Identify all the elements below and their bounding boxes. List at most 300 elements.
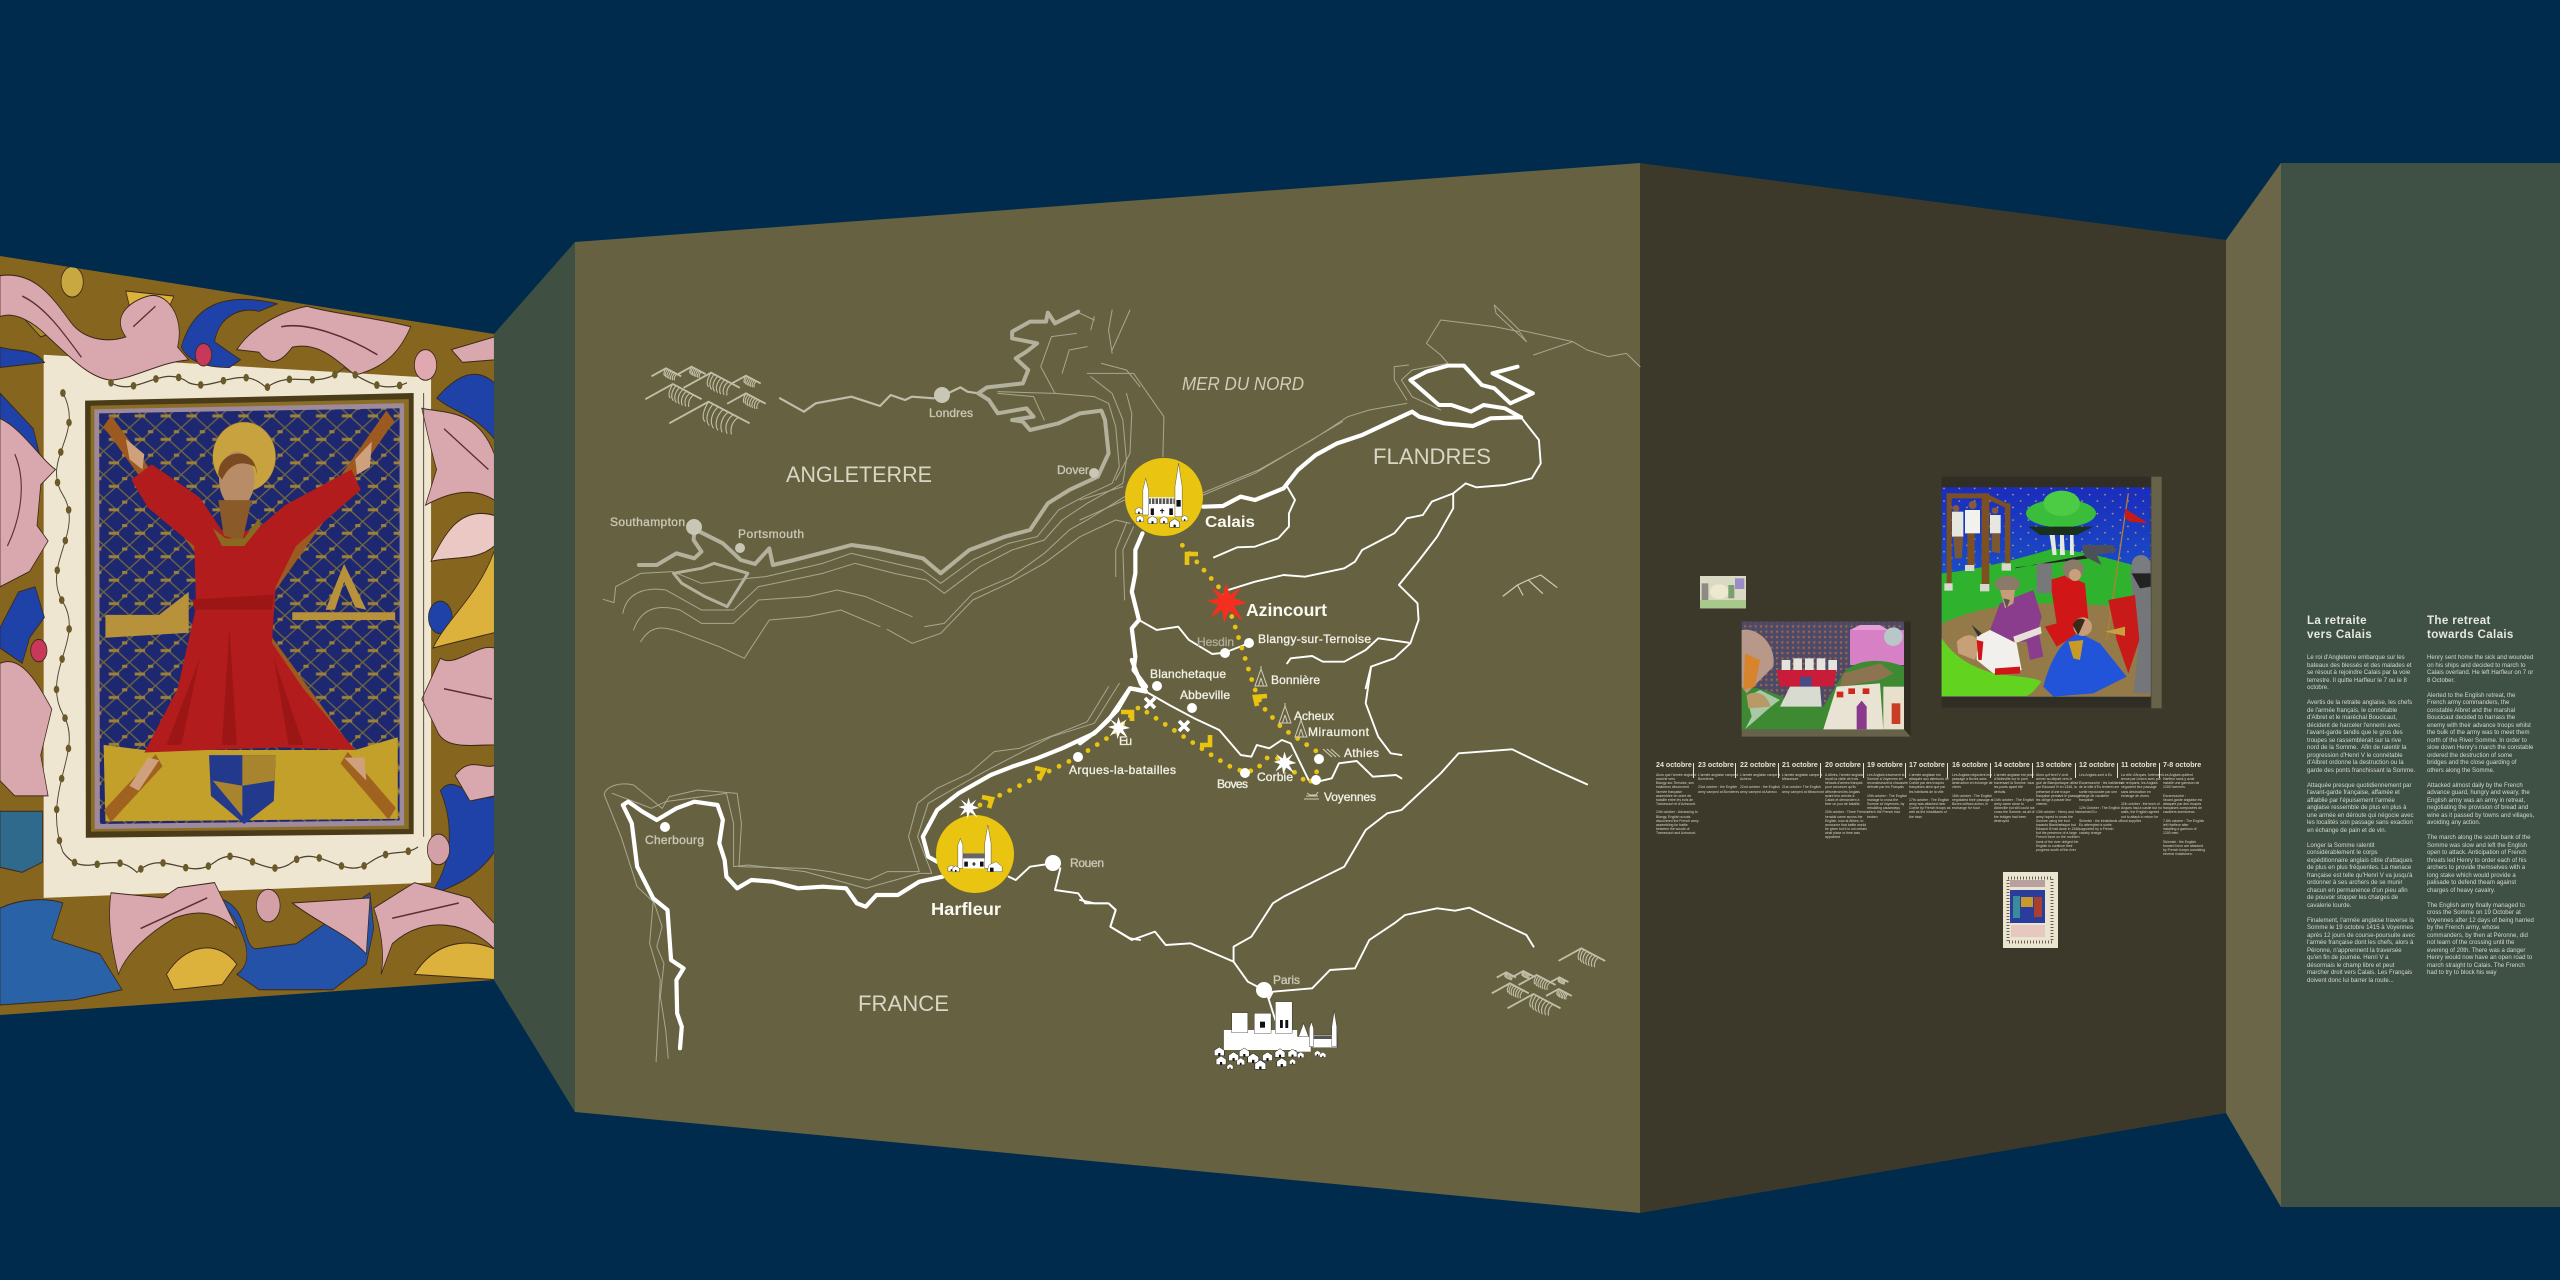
major city labels xyxy=(931,514,1327,919)
red robe xyxy=(131,464,361,753)
icon: mountains England xyxy=(645,367,766,434)
timeline column 12 octobre: reached Eu xyxy=(2079,810,2097,814)
timeline column 24 octobre: 24th october : Advancing to xyxy=(1656,810,1698,814)
timeline column 17 octobre: well as the inhabitants of xyxy=(1909,810,1947,814)
timeline column 13 octobre: progress south of the river xyxy=(2036,848,2076,852)
timeline column 20 octobre: pour annoncer qu'ils xyxy=(1825,785,1856,789)
timeline column 7-8 octobre xyxy=(2163,761,2205,856)
town labels: Portsmouth xyxy=(738,527,804,541)
French paragraphs: en échange de pain et de vin. xyxy=(2307,828,2386,834)
timeline column 19 octobre: Somme at Voyennes, by xyxy=(1867,802,1904,806)
timeline column 20 octobre: appointed xyxy=(1825,835,1840,839)
timeline column 23 octobre: L'armée anglaise campe à xyxy=(1698,773,1738,777)
English paragraphs: not learn of the crossing until the xyxy=(2427,940,2514,946)
town labels: Rouen xyxy=(1070,856,1104,870)
English coastline xyxy=(639,312,1109,573)
English paragraphs: had to try to block his way xyxy=(2427,970,2497,976)
icon: rain hatch at Athies xyxy=(1323,749,1340,757)
image: manuscript page thumbnail xyxy=(2003,872,2058,948)
red executioner xyxy=(2045,575,2088,647)
French paragraphs: bateaux des blessés et des malades et xyxy=(2307,662,2412,668)
timeline column 20 octobre: announce that battle would xyxy=(1825,823,1866,827)
timeline column 12 octobre: 12th October : The English xyxy=(2079,806,2120,810)
timeline column 7-8 octobre: installing a garrison of xyxy=(2163,827,2196,831)
English paragraphs: slow down Henry's march the constable xyxy=(2427,745,2533,751)
timeline column 11 octobre: not to attack in return for xyxy=(2121,815,2158,819)
English paragraphs: ordered the destruction of some xyxy=(2427,752,2512,758)
French paragraphs: d'Albret et le maréchal Boucicaut, xyxy=(2307,715,2397,721)
timeline column 21 octobre: 21 octobre xyxy=(1782,761,1818,769)
French paragraphs: de plus en plus fréquentes. La menace xyxy=(2307,865,2411,871)
region labels: ANGLETERRE xyxy=(786,462,932,487)
timeline column 7-8 octobre: Escarmouche : xyxy=(2163,794,2186,798)
timeline column 13 octobre: but the presence of a large xyxy=(2036,831,2077,835)
timeline column 11 octobre: échange de vivres. xyxy=(2121,794,2150,798)
timeline column 13 octobre: Alors qu'Henri V croit xyxy=(2036,773,2068,777)
French paragraphs: Avertis de la retraite anglaise, les chefs xyxy=(2307,700,2412,706)
English paragraphs: palisade to defend theam against xyxy=(2427,880,2516,886)
hands and feet xyxy=(126,439,372,791)
timeline column 7-8 octobre: Skirmish : the English xyxy=(2163,840,2196,844)
icon: Harfleur marker xyxy=(936,815,1014,893)
English paragraphs: wine as it passed by towns and villages, xyxy=(2427,812,2534,818)
English paragraphs: others along the Somme. xyxy=(2427,768,2495,774)
timeline column 11 octobre: sans destruction en xyxy=(2121,790,2151,794)
timeline column 24 octobre: Tramecourt and Azincourt. xyxy=(1656,831,1696,835)
timeline column 14 octobre xyxy=(1994,761,2035,823)
English paragraphs: by the French army, whose xyxy=(2427,925,2499,931)
timeline column 20 octobre: what place or time was xyxy=(1825,831,1860,835)
timeline column 12 octobre: cavalry charge xyxy=(2079,831,2101,835)
timeline column 17 octobre: françaises ainsi que par xyxy=(1909,785,1945,789)
timeline column 13 octobre: English to continue their xyxy=(2036,844,2073,848)
timeline column 17 octobre: L'armée anglaise est xyxy=(1909,773,1941,777)
French paragraphs: désormais le champ libre et peut xyxy=(2307,962,2394,968)
timeline column 7-8 octobre: 7-8 octobre xyxy=(2163,761,2201,769)
timeline column 7-8 octobre: attaquée par des troupes xyxy=(2163,802,2201,806)
town labels: Blanchetaque xyxy=(1150,667,1226,681)
timeline column 17 octobre xyxy=(1909,761,1950,819)
town labels: Blangy-sur-Ternoise xyxy=(1258,632,1371,646)
green hill xyxy=(1942,548,2151,627)
timeline column 13 octobre: bank of the river obliged the xyxy=(2036,840,2078,844)
icon: small hills xyxy=(1503,575,1557,596)
French paragraphs: de pouvoir stopper les charges de xyxy=(2307,895,2398,901)
region labels: FLANDRES xyxy=(1373,444,1491,469)
French paragraphs: chacun en permanence d'un pieu afin xyxy=(2307,888,2408,894)
rivers xyxy=(1139,417,1541,688)
English paragraphs: Alerted to the English retreat, the xyxy=(2427,692,2515,698)
English paragraphs xyxy=(2427,654,2534,976)
timeline column 12 octobre: Skirmish : the inhabitants of xyxy=(2079,819,2121,823)
timeline column 19 octobre: manage to cross the xyxy=(1867,798,1898,802)
timeline column 12 octobre: charge de cavalerie xyxy=(2079,794,2109,798)
timeline column 24 octobre: Blangy-sur-Ternoise, ses xyxy=(1656,781,1694,785)
icon: blocked crossings xyxy=(1145,698,1189,731)
image: small miniature xyxy=(1700,576,1746,608)
major city labels: Azincourt xyxy=(1246,600,1327,620)
timeline column 14 octobre: les ponts ayant été xyxy=(1994,785,2023,789)
timeline column 13 octobre: 13 octobre xyxy=(2036,761,2072,769)
English paragraphs: Henry sent home the sick and wounded xyxy=(2427,655,2533,661)
timeline column 22 octobre: Acheux xyxy=(1740,777,1751,781)
timeline column 13 octobre: army hoped to cross the xyxy=(2036,815,2073,819)
background wall panels xyxy=(494,163,2560,1213)
town labels: Miraumont xyxy=(1308,725,1370,739)
timeline column 7-8 octobre: 1200 men. xyxy=(2163,831,2179,835)
timeline column 20 octobre: fixer un jour de bataille. xyxy=(1825,802,1861,806)
icon: mountains east xyxy=(1492,948,1605,1016)
timeline column 23 octobre: 23 octobre xyxy=(1698,761,1734,769)
English paragraphs: 8 October. xyxy=(2427,678,2455,684)
English paragraphs: French army commanders, the xyxy=(2427,700,2509,706)
French heading: vers Calais xyxy=(2307,628,2372,641)
French paragraphs: Longer la Somme ralentit xyxy=(2307,842,2375,848)
town labels xyxy=(610,406,1379,987)
English paragraphs: north of the River Somme. In order to xyxy=(2427,738,2527,744)
blue kneeling prisoner xyxy=(2043,633,2127,697)
timeline column 19 octobre: reconstruisant la chaussée xyxy=(1867,781,1908,785)
timeline column 19 octobre: Les Anglais traversent la xyxy=(1867,773,1904,777)
French paragraphs: considérablement le corps xyxy=(2307,850,2378,856)
timeline column 13 octobre: par Edouard III en 1346, la xyxy=(2036,785,2077,789)
English paragraphs: avoiding any action. xyxy=(2427,820,2480,826)
timeline column 20 octobre: avant leur arrivée à xyxy=(1825,794,1854,798)
timeline column 13 octobre: présence d'une troupe xyxy=(2036,790,2070,794)
timeline column 19 octobre: which the French had xyxy=(1867,810,1900,814)
town labels: Londres xyxy=(929,406,973,420)
brown ground xyxy=(1942,603,2151,697)
timeline column 11 octobre: de remparts, les Anglais xyxy=(2121,781,2158,785)
timeline column 21 octobre: L'armée anglaise campe à xyxy=(1782,773,1822,777)
English paragraphs: threats led Henry to order each of his xyxy=(2427,858,2526,864)
wooden saltire cross xyxy=(107,416,392,816)
French paragraphs: Finalement, l'armée anglaise traverse la xyxy=(2307,918,2414,924)
carpenter tools xyxy=(105,592,189,638)
timeline column 17 octobre: the town xyxy=(1909,815,1922,819)
timeline column 24 octobre: assembling for battle xyxy=(1656,823,1688,827)
icon: skirmish stars xyxy=(959,717,1296,818)
timeline column 23 octobre: army camped at Bonnières xyxy=(1698,790,1739,794)
timeline column 19 octobre: détruite par les Français xyxy=(1867,785,1904,789)
town labels: Boves xyxy=(1217,777,1248,791)
French paragraphs: les localités son passage sans exaction xyxy=(2307,820,2413,826)
timeline column 7-8 octobre: 1200 hommes. xyxy=(2163,785,2186,789)
timeline column 13 octobre: arriver au départ vers le xyxy=(2036,777,2072,781)
timeline column 20 octobre: reçoit la visite de trois xyxy=(1825,777,1858,781)
English paragraphs: enemy with their advance troops whilst xyxy=(2427,722,2531,728)
halo xyxy=(213,422,276,491)
French paragraphs: Le roi d'Angleterre embarque sur les xyxy=(2307,655,2405,661)
image: large miniature of executions with frame xyxy=(1942,477,2162,708)
timeline column 17 octobre: army was attacked near xyxy=(1909,802,1946,806)
French paragraphs: troupes se rassemblerait sur la rive xyxy=(2307,738,2401,744)
region labels xyxy=(786,374,1491,1016)
timeline column 24 octobre: Alors que l'armée anglaise xyxy=(1656,773,1696,777)
French paragraphs: française est telle qu'Henri V va jusqu'à xyxy=(2307,872,2412,878)
gallows xyxy=(1947,493,2010,587)
timeline column 12 octobre: Escarmouche : les habitants xyxy=(2079,781,2122,785)
English heading: towards Calais xyxy=(2427,628,2514,641)
timeline column 19 octobre: 19 octobre xyxy=(1867,761,1903,769)
timeline column 16 octobre: passage à Boves sans xyxy=(1952,777,1987,781)
region labels: FRANCE xyxy=(858,991,949,1016)
French paragraphs: progression d'Henri V le connétable xyxy=(2307,752,2403,758)
English paragraphs: The English army finally managed to xyxy=(2427,902,2525,908)
timeline column 11 octobre: La ville d'Arques, fortement xyxy=(2121,773,2163,777)
English paragraphs: Henry would now have an open road to xyxy=(2427,955,2532,961)
English paragraphs: bridges and the close guarding of xyxy=(2427,760,2516,766)
route direction chevrons xyxy=(982,554,1267,808)
timeline column 7-8 octobre: cavaliers aventureux. xyxy=(2163,810,2195,814)
French paragraphs: d'Albret ordonne la destruction ou la xyxy=(2307,760,2404,766)
timeline column 21 octobre xyxy=(1782,761,1824,794)
city dots xyxy=(660,387,1324,998)
timeline column 20 octobre: be given but it is not certain xyxy=(1825,827,1867,831)
timeline column 16 octobre xyxy=(1952,761,1994,810)
timeline column 11 octobre: food supplies xyxy=(2121,819,2141,823)
timeline column 12 octobre: de la ville d'Eu tentent une xyxy=(2079,785,2119,789)
timeline column 12 octobre xyxy=(2079,761,2122,835)
timeline column 14 octobre: traversant la Somme, tous xyxy=(1994,781,2034,785)
timeline column 20 octobre xyxy=(1825,761,1868,839)
timeline column 24 octobre: bataille entre les bois de xyxy=(1656,798,1693,802)
vine border xyxy=(56,368,424,872)
timeline column 16 octobre: 16th october : The English xyxy=(1952,794,1992,798)
icon: bridge at Voyennes xyxy=(1304,792,1319,799)
England coast and contours xyxy=(603,310,1140,658)
timeline column 17 octobre: 17 octobre xyxy=(1909,761,1945,769)
timeline column 17 octobre: attaquée aux alentours de xyxy=(1909,777,1949,781)
French paragraphs: cavalerie lourde. xyxy=(2307,902,2351,908)
English paragraphs: on his ships and decided to march to xyxy=(2427,662,2526,668)
town labels: Acheux xyxy=(1294,709,1334,723)
timeline column 13 octobre: Somme using the ford xyxy=(2036,819,2070,823)
timeline column 14 octobre: destroyed xyxy=(1994,819,2009,823)
timeline column 23 octobre: 23rd october : the English xyxy=(1698,785,1737,789)
timeline column 24 octobre: marche vers xyxy=(1656,777,1675,781)
French paragraphs: l'armée française dont les chefs, alors à xyxy=(2307,940,2413,946)
timeline column 23 octobre: Bonnières xyxy=(1698,777,1713,781)
English paragraphs: commanders, by then at Péronne, did xyxy=(2427,932,2528,938)
timeline column 24 octobre: l'armée française xyxy=(1656,790,1682,794)
timeline column 24 octobre: between the woods of xyxy=(1656,827,1689,831)
French paragraphs: l'avant-garde tandis que le gros des xyxy=(2307,730,2403,736)
timeline column 20 octobre: 20th october : Three French xyxy=(1825,810,1868,814)
town labels: Cherbourg xyxy=(645,833,704,847)
French paragraphs: terrestre. Il quitte Harfleur le 7 ou le 8 xyxy=(2307,678,2407,684)
panel: illuminated manuscript of Saint Andrew xyxy=(0,250,494,1020)
timeline column 21 octobre: Miraumont xyxy=(1782,777,1798,781)
town labels: Paris xyxy=(1273,973,1300,987)
French paragraphs: expéditionnaire anglais cible d'attaques xyxy=(2307,858,2412,864)
French paragraphs: après 12 jours de course-poursuite avec xyxy=(2307,932,2415,938)
French paragraphs: Attaquée presque quotidiennement par xyxy=(2307,782,2412,788)
French paragraphs: marcher droit vers Calais. Les Français xyxy=(2307,970,2412,976)
timeline column 14 octobre: d'Abbeville sur le pont xyxy=(1994,777,2028,781)
bright foreground xyxy=(1942,638,2042,696)
French paragraphs: décident de harceler l'ennemi avec xyxy=(2307,722,2400,728)
English paragraphs: march straight to Calais. The French xyxy=(2427,962,2525,968)
timeline column 24 octobre: 24 octobre xyxy=(1656,761,1692,769)
timeline column 11 octobre: Arques had a castle but no xyxy=(2121,806,2162,810)
timeline column 16 octobre: 16 octobre xyxy=(1952,761,1988,769)
timeline column 12 octobre: sortie repoussée par une xyxy=(2079,790,2117,794)
timeline column 14 octobre: cross the Somme, as all of xyxy=(1994,810,2035,814)
timeline column 17 octobre: Corbie par des troupes xyxy=(1909,781,1944,785)
sea contour lines xyxy=(603,310,1140,658)
town labels: Dover xyxy=(1057,463,1089,477)
timeline column 13 octobre xyxy=(2036,761,2081,852)
timeline column 14 octobre: army came close to xyxy=(1994,802,2024,806)
English paragraphs: long stake which would provide a xyxy=(2427,872,2516,878)
timeline column 16 octobre: destruction en échange de xyxy=(1952,781,1993,785)
English paragraphs: charges of heavy cavalry. xyxy=(2427,888,2495,894)
timeline column 13 octobre: les oblige à passer leur xyxy=(2036,798,2071,802)
panel: timeline of the retreat xyxy=(1656,761,2205,856)
timeline column 12 octobre: Eu attempted a sortie xyxy=(2079,823,2112,827)
English paragraphs: cross the Somme on 19 October at xyxy=(2427,910,2521,916)
English paragraphs: Attacked almost daily by the French xyxy=(2427,782,2523,788)
acanthus leaf decoration xyxy=(0,267,494,1005)
timeline column 16 octobre: Boves without action, in xyxy=(1952,802,1988,806)
France Normandy coast and Seine xyxy=(604,683,1140,1062)
town labels: Athies xyxy=(1344,746,1379,760)
timeline column 24 octobre: assemblée en ordre de xyxy=(1656,794,1691,798)
English paragraphs: Boucicaut decided to harrass the xyxy=(2427,715,2515,721)
timeline column 7-8 octobre: Harfleur sans y avoir xyxy=(2163,777,2195,781)
hanged figures xyxy=(1952,501,2001,558)
Thames xyxy=(780,387,978,412)
panel: map of the campaign xyxy=(575,163,1640,1213)
timeline column 11 octobre: 11 octobre xyxy=(2121,761,2156,769)
timeline column 21 octobre: 21st october: The English xyxy=(1782,785,1821,789)
timeline column 7-8 octobre: forward force are attacked xyxy=(2163,844,2203,848)
town labels: Abbeville xyxy=(1180,688,1230,702)
timeline column 16 octobre: vivres xyxy=(1952,785,1961,789)
timeline column 21 octobre: army camped at Miraumont xyxy=(1782,790,1824,794)
timeline column 14 octobre: Abbeville but still could not xyxy=(1994,806,2035,810)
timeline column 19 octobre: broken xyxy=(1867,815,1878,819)
timeline column 13 octobre: French force on the northern xyxy=(2036,835,2080,839)
timeline column 24 octobre: Blangy, English scouts xyxy=(1656,815,1690,819)
text block: French narrative xyxy=(2307,614,2415,984)
timeline column 20 octobre: English, now at Athies, to xyxy=(1825,819,1863,823)
timeline column 20 octobre: A Athies, l'armée anglaise xyxy=(1825,773,1864,777)
town labels: Southampton xyxy=(610,515,685,529)
French paragraphs: une armée en déroute qui négocie avec xyxy=(2307,812,2414,818)
timeline column 22 octobre: army camped at Acheux xyxy=(1740,790,1777,794)
timeline column 20 octobre: hérauts d'armes français xyxy=(1825,781,1863,785)
English paragraphs: negotiating the provision of bread and xyxy=(2427,805,2528,811)
timeline column 14 octobre: L'armée anglaise est prise xyxy=(1994,773,2034,777)
timeline column 16 octobre: Les Anglais négocient leur xyxy=(1952,773,1992,777)
French paragraphs: l'avant-garde française, affamée et xyxy=(2307,790,2400,796)
English paragraphs: evening of 20th. There was a danger xyxy=(2427,948,2525,954)
icon: Calais marker xyxy=(1125,458,1203,536)
town labels: Eu xyxy=(1119,734,1132,748)
major city labels: Harfleur xyxy=(931,899,1001,919)
English heading xyxy=(2427,614,2514,641)
French paragraphs: ordonner à ses archers de se munir xyxy=(2307,880,2402,886)
axe xyxy=(2015,555,2087,568)
timeline column 24 octobre: éclaireurs découvrent xyxy=(1656,785,1689,789)
English paragraphs: Voyennes after 12 days of being harried xyxy=(2427,918,2534,924)
timeline column 11 octobre: tenue par Lisbon avec par xyxy=(2121,777,2161,781)
French paragraphs: Somme le 19 octobre 1415 à Voyennes xyxy=(2307,925,2413,931)
contours xyxy=(1080,305,1640,600)
English paragraphs: Calais overland. He left Harfleur on 7 or xyxy=(2427,670,2533,676)
timeline column 22 octobre: 22nd october : the English xyxy=(1740,785,1780,789)
timeline column 11 octobre: walls, the English agreed xyxy=(2121,810,2159,814)
timeline column 19 octobre xyxy=(1867,761,1908,819)
timeline column 24 octobre: Tramecourt et d'Azincourt. xyxy=(1656,802,1696,806)
timeline column 12 octobre: 12 octobre xyxy=(2079,761,2115,769)
English paragraphs: archers to provide themselves with a xyxy=(2427,865,2525,871)
text block: English narrative xyxy=(2427,614,2534,976)
English paragraphs: open to attack. Anticipation of French xyxy=(2427,850,2526,856)
English paragraphs: The march along the south bank of the xyxy=(2427,835,2531,841)
English paragraphs: the bulk of the army was to meet them xyxy=(2427,730,2530,736)
timeline column 20 octobre: 20 octobre xyxy=(1825,761,1861,769)
timeline column 22 octobre xyxy=(1740,761,1780,794)
timeline column 11 octobre xyxy=(2121,761,2163,823)
French heading: La retraite xyxy=(2307,614,2367,627)
timeline column 19 octobre: Somme à Voyennes en xyxy=(1867,777,1903,781)
purple executioner xyxy=(1990,590,2043,660)
region labels: MER DU NORD xyxy=(1182,374,1304,394)
timeline column 24 octobre xyxy=(1656,761,1699,835)
French paragraphs: anglaise ressemble de plus en plus à xyxy=(2307,805,2406,811)
inner miniature xyxy=(85,393,414,838)
Isle of Wight xyxy=(674,563,748,607)
France north-east rivers and coast xyxy=(1080,305,1640,688)
French paragraphs: octobre. xyxy=(2307,685,2329,691)
timeline column 16 octobre: exchange for food xyxy=(1952,806,1980,810)
French paragraphs: Péronne, n'apprennent la traversée xyxy=(2307,948,2402,954)
tree xyxy=(2026,491,2096,555)
icon: Paris castle and town xyxy=(1214,1002,1337,1069)
timeline column 13 octobre: française pendant le passage xyxy=(2036,794,2081,798)
English paragraphs: English army was an army in retreat, xyxy=(2427,798,2525,804)
timeline column 11 octobre: 11th october : the town of xyxy=(2121,802,2160,806)
image: medium miniature with frame xyxy=(1742,622,1911,737)
timeline column 7-8 octobre: several rivaldsmen. xyxy=(2163,852,2193,856)
timeline column 17 octobre: Corbie by French troops as xyxy=(1909,806,1950,810)
French paragraphs: affaiblie par l'épuisement l'armée xyxy=(2307,798,2395,804)
timeline column 16 octobre: negotiated their passage at xyxy=(1952,798,1993,802)
timeline column 20 octobre: Calais et demandent à xyxy=(1825,798,1859,802)
timeline column 7-8 octobre: by French troops consisting xyxy=(2163,848,2205,852)
cream manuscript frame xyxy=(44,355,431,898)
timeline column 20 octobre: affronteront les Anglais xyxy=(1825,790,1860,794)
timeline column 19 octobre: 19th october : The English xyxy=(1867,794,1907,798)
soldier with red shield and banner xyxy=(2107,493,2128,640)
French paragraphs: se résout à rejoindre Calais par la voie xyxy=(2307,670,2410,676)
Somme, Seine, Oise, Marne rivers xyxy=(1080,660,1587,1020)
timeline column 22 octobre: L'armée anglaise campe à xyxy=(1740,773,1780,777)
town labels: Corbie xyxy=(1257,770,1293,784)
timeline column 7-8 octobre: françaises composées de xyxy=(2163,806,2202,810)
kneeling victim xyxy=(1977,630,2022,673)
icon: Azincourt battle star xyxy=(1207,583,1247,623)
English paragraphs: advance guard, hungry and weary, the xyxy=(2427,790,2530,796)
timeline column 14 octobre: 14 octobre xyxy=(1994,761,2030,769)
timeline column 14 octobre: détruits. xyxy=(1994,790,2006,794)
ground xyxy=(104,737,398,821)
icon: camp tents xyxy=(1255,666,1307,737)
town labels: Hesdin xyxy=(1197,635,1234,649)
